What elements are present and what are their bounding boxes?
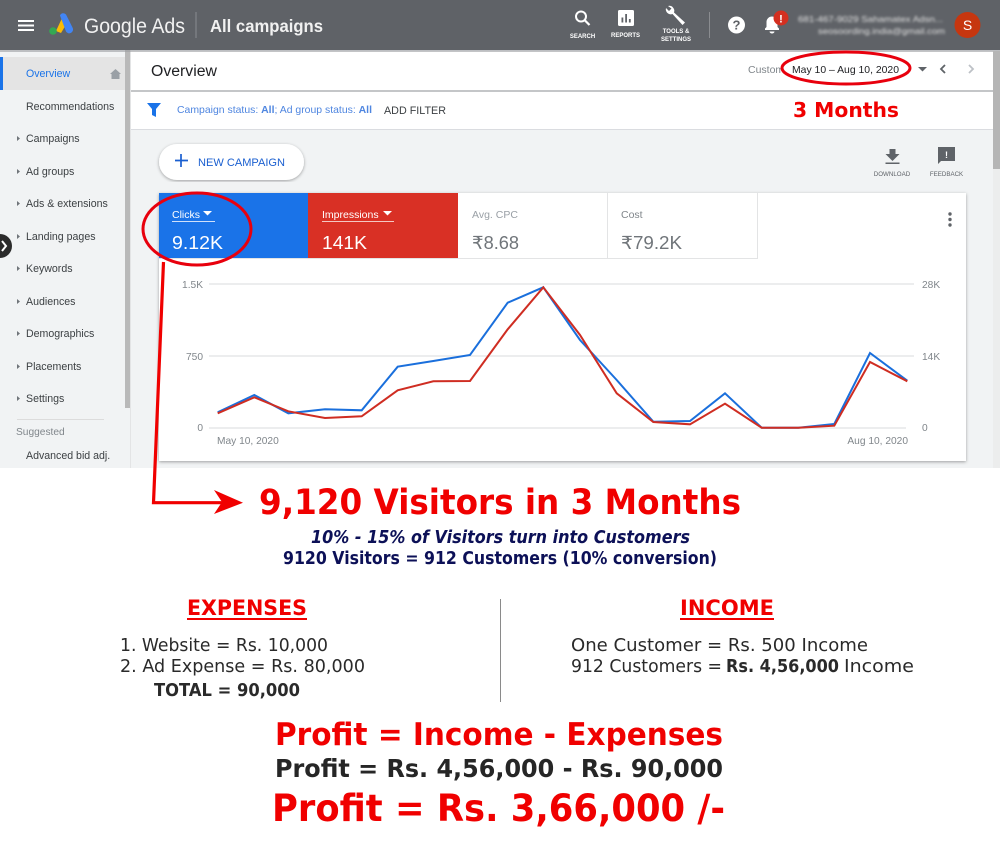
axis labels: 1.5K <box>182 280 203 291</box>
icon: menu <box>18 20 34 31</box>
panel: filter row: ADD FILTER <box>384 105 446 117</box>
icon: feedback: FEEDBACK <box>930 171 964 178</box>
icon: help: ? <box>733 18 741 32</box>
income list: One Customer = Rs. 500 Income <box>571 635 868 656</box>
text: All campaigns: All campaigns <box>210 16 323 36</box>
line chart: clicks and impressions <box>182 280 940 447</box>
panel: sidebar navigation: Settings <box>26 393 64 405</box>
icon: tools and settings <box>661 6 691 43</box>
panel: expenses <box>120 596 365 701</box>
icon: sidebar collapse button <box>0 234 12 258</box>
icon: reports <box>611 10 640 39</box>
panel: sidebar navigation: Campaigns <box>26 133 80 145</box>
metric tab: cost: ₹79.2K <box>621 233 682 253</box>
icon: feedback <box>930 147 964 178</box>
icon: feedback: ! <box>945 150 948 160</box>
panel: sidebar navigation: Advanced bid adj. <box>26 450 110 462</box>
button: new campaign <box>159 144 304 180</box>
panel: sidebar navigation: Suggested <box>16 427 65 438</box>
annotation: clicks ellipse <box>143 193 251 265</box>
panel: sidebar navigation: Ads & extensions <box>26 198 108 210</box>
metric tab: avg cpc: Avg. CPC <box>472 209 518 221</box>
formula: profit definition: Profit = Income - Expenses <box>275 717 723 753</box>
axis labels: Aug 10, 2020 <box>847 436 908 447</box>
metric tab: avg cpc: ₹8.68 <box>472 233 519 253</box>
metric tab: impressions <box>308 193 458 258</box>
metric tab: clicks: 9.12K <box>172 233 223 253</box>
panel: sidebar navigation: Keywords <box>26 263 73 275</box>
icon: help <box>728 16 745 34</box>
panel: performance card <box>159 193 966 461</box>
panel: filter row: Campaign status: All; Ad group status: All <box>177 104 372 116</box>
panel: sidebar navigation: Overview <box>26 68 70 80</box>
icon: download: DOWNLOAD <box>874 171 911 178</box>
expense list: TOTAL = 90,000 <box>154 680 300 701</box>
annotation: 3 Months: 3 Months <box>793 98 899 122</box>
metric tab: clicks: Clicks <box>172 209 200 221</box>
panel: overview header: May 10 – Aug 10, 2020 <box>792 64 899 76</box>
income list: Income <box>844 656 914 677</box>
icon: Google Ads logo <box>49 13 73 35</box>
icon: reports: REPORTS <box>611 33 640 39</box>
icon: notifications bell: ! <box>779 14 783 26</box>
panel: sidebar navigation: Recommendations <box>26 101 114 113</box>
text: blurred account details <box>798 14 945 36</box>
icon: search <box>570 12 595 40</box>
metric tab: clicks <box>159 193 308 258</box>
panel: top bar <box>0 0 1000 52</box>
decorative page scrollbar <box>993 51 1000 169</box>
panel: overview header <box>131 51 993 92</box>
icon: tools and settings: TOOLS & <box>663 29 690 35</box>
arrow: clicks to visitors <box>154 262 243 514</box>
text: conversion rate: 10% - 15% of Visitors turn into Customers <box>311 528 690 548</box>
axis labels: 750 <box>186 352 203 363</box>
icon: search: SEARCH <box>570 34 595 40</box>
panel: sidebar navigation: Audiences <box>26 296 75 308</box>
heading: expenses: EXPENSES <box>187 596 307 620</box>
expense list <box>120 635 365 701</box>
axis labels: 0 <box>922 423 928 434</box>
heading: income: INCOME <box>680 596 774 620</box>
text: Google Ads: Google Ads <box>84 15 185 38</box>
button: new campaign: NEW CAMPAIGN <box>198 157 285 169</box>
panel: sidebar navigation: Placements <box>26 361 81 373</box>
income list: Rs. 4,56,000 <box>726 656 839 677</box>
icon: tools and settings: SETTINGS <box>661 37 691 43</box>
text: blurred account details: 681-467-9029 Sahamatex Adsn... <box>798 14 943 24</box>
axis labels: 14K <box>922 352 940 363</box>
series: impressions <box>218 287 907 428</box>
metric tab: impressions: Impressions <box>322 209 379 221</box>
annotation: date range ellipse <box>782 52 910 84</box>
icon: avatar <box>954 12 980 38</box>
panel: overview header: Custom <box>748 64 784 76</box>
icon: download <box>874 149 911 178</box>
panel: sidebar navigation: Ad groups <box>26 166 74 178</box>
axis labels: 0 <box>197 423 203 434</box>
axis labels: May 10, 2020 <box>217 436 279 447</box>
panel: sidebar navigation <box>0 50 131 468</box>
panel: filter row <box>131 92 993 130</box>
income list <box>571 635 914 677</box>
panel: Google Ads screenshot background <box>0 50 1000 468</box>
icon: notifications bell <box>765 10 788 34</box>
metric tab: cost <box>621 193 758 258</box>
panel: overview header: Overview <box>151 63 218 80</box>
panel: sidebar navigation: Landing pages <box>26 231 96 243</box>
expense list: 2. Ad Expense = Rs. 80,000 <box>120 656 365 677</box>
panel: income <box>571 596 914 677</box>
income list: 912 Customers = <box>571 656 722 677</box>
axis labels: 28K <box>922 280 940 291</box>
formula: profit result: Profit = Rs. 3,66,000 /- <box>272 787 725 830</box>
metric tab: cost: Cost <box>621 209 643 221</box>
axis labels <box>182 280 940 447</box>
icon: more menu <box>948 212 952 227</box>
formula: profit calculation: Profit = Rs. 4,56,000 - Rs. 90,000 <box>275 754 723 783</box>
series: clicks <box>218 287 907 428</box>
panel: sidebar navigation: Demographics <box>26 328 94 340</box>
metric tab: avg cpc <box>472 193 608 258</box>
divider <box>500 599 501 702</box>
metric tab: impressions: 141K <box>322 233 367 253</box>
text: visitors to customers: 9120 Visitors = 912 Customers (10% conversion) <box>283 549 717 569</box>
text: blurred account details: seosoording.india@gmail.com <box>818 26 945 36</box>
expense list: 1. Website = Rs. 10,000 <box>120 635 328 656</box>
heading: visitors: 9,120 Visitors in 3 Months <box>259 483 741 523</box>
icon: avatar: S <box>963 17 972 33</box>
